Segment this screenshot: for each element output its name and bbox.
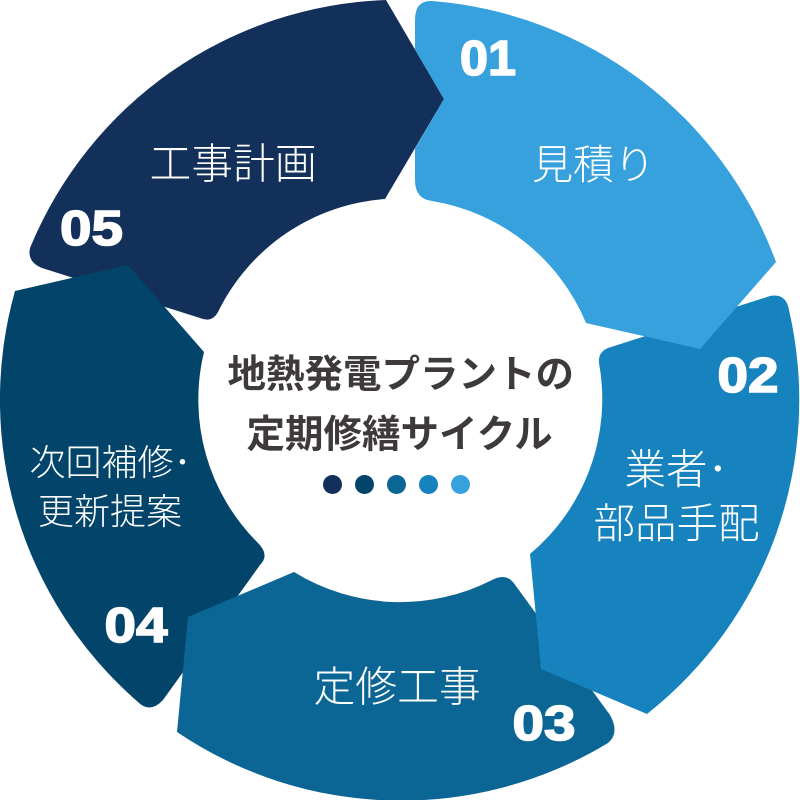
segment 05: 工事計画: 05 [60, 202, 123, 256]
center dots [323, 475, 470, 494]
center title [228, 354, 574, 456]
segment 03: 定修工事: 定修工事 [314, 664, 481, 710]
center title: 定期修繕サイクル [246, 414, 553, 456]
segment 02: 業者・部品手配 [530, 296, 799, 714]
segment 03: 定修工事: 03 [512, 697, 576, 751]
segment 02: 業者・部品手配: 業者･ [624, 446, 728, 493]
segment 01: 見積り [415, 1, 776, 349]
segment 04: 次回補修・更新提案: 04 [104, 599, 168, 653]
segment 04: 次回補修・更新提案: 次回補修･ [30, 442, 192, 483]
segment 02: 業者・部品手配: 部品手配 [594, 500, 760, 547]
center title: 地熱発電プラントの [228, 354, 574, 396]
segment 02: 業者・部品手配: 02 [718, 349, 778, 403]
segment 01: 見積り: 01 [460, 32, 516, 86]
segment 04: 次回補修・更新提案: 更新提案 [38, 491, 182, 532]
segment 03: 定修工事 [177, 572, 615, 800]
segment 05: 工事計画: 工事計画 [150, 140, 317, 188]
segment 04: 次回補修・更新提案 [0, 265, 265, 708]
segment 01: 見積り: 見積り [532, 142, 655, 188]
segment 05: 工事計画 [30, 0, 444, 320]
